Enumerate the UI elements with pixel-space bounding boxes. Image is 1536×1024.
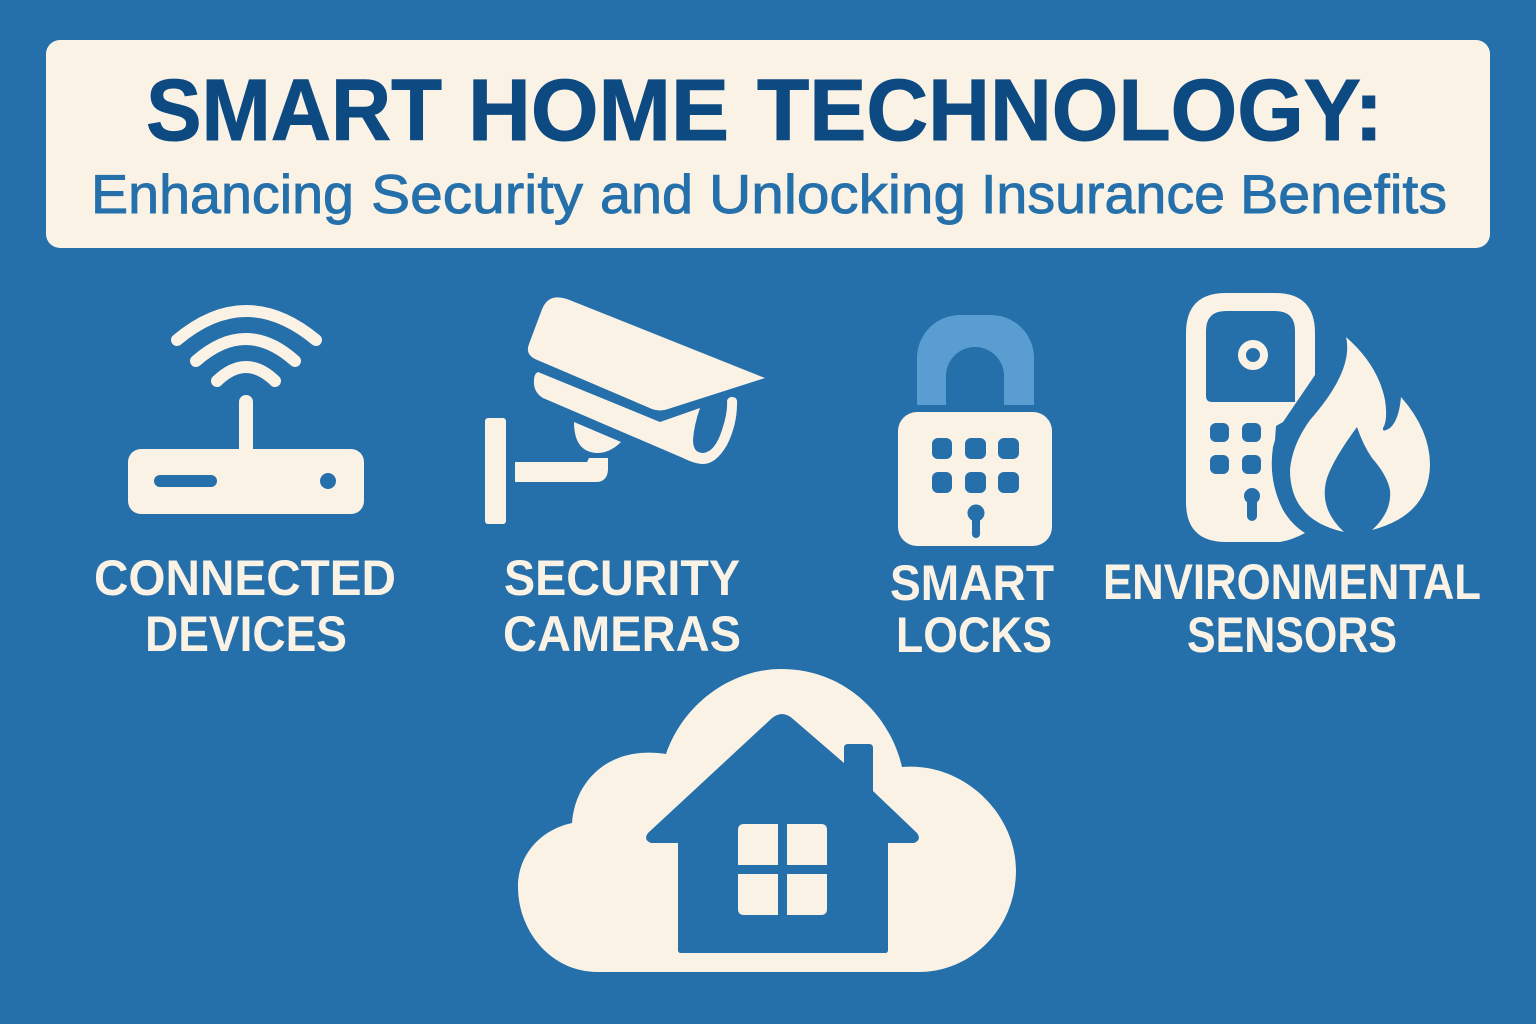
label: environmental sensors: ENVIRONMENTAL [1103, 554, 1481, 610]
title: TECHNOLOGY: [757, 62, 1383, 159]
subtitle: Enhancing [91, 163, 354, 225]
icon: environmental sensor and flame [1186, 293, 1430, 542]
label: security cameras [503, 550, 741, 662]
icon: smart lock [898, 315, 1052, 546]
subtitle: Unlocking [709, 163, 966, 225]
label: security cameras: CAMERAS [503, 606, 741, 662]
subtitle: and [600, 163, 693, 225]
label: smart locks: LOCKS [896, 607, 1052, 663]
label: smart locks [890, 555, 1054, 663]
subtitle: Insurance [981, 163, 1225, 225]
title: HOME [468, 62, 729, 159]
panel: title banner [46, 40, 1490, 248]
label: environmental sensors: SENSORS [1187, 607, 1397, 663]
label: environmental sensors [1103, 554, 1481, 663]
icon: cloud with house [518, 669, 1016, 972]
label: connected devices: DEVICES [145, 606, 347, 662]
subtitle: Security [371, 163, 584, 225]
icon: security camera [485, 297, 765, 524]
title [146, 62, 1383, 159]
label: connected devices [94, 550, 396, 662]
subtitle [91, 163, 1447, 225]
title: SMART [146, 62, 442, 159]
subtitle: Benefits [1240, 163, 1447, 225]
label: smart locks: SMART [890, 555, 1054, 611]
label: security cameras: SECURITY [504, 550, 740, 606]
label: connected devices: CONNECTED [94, 550, 396, 606]
icon: wifi router [128, 311, 364, 514]
